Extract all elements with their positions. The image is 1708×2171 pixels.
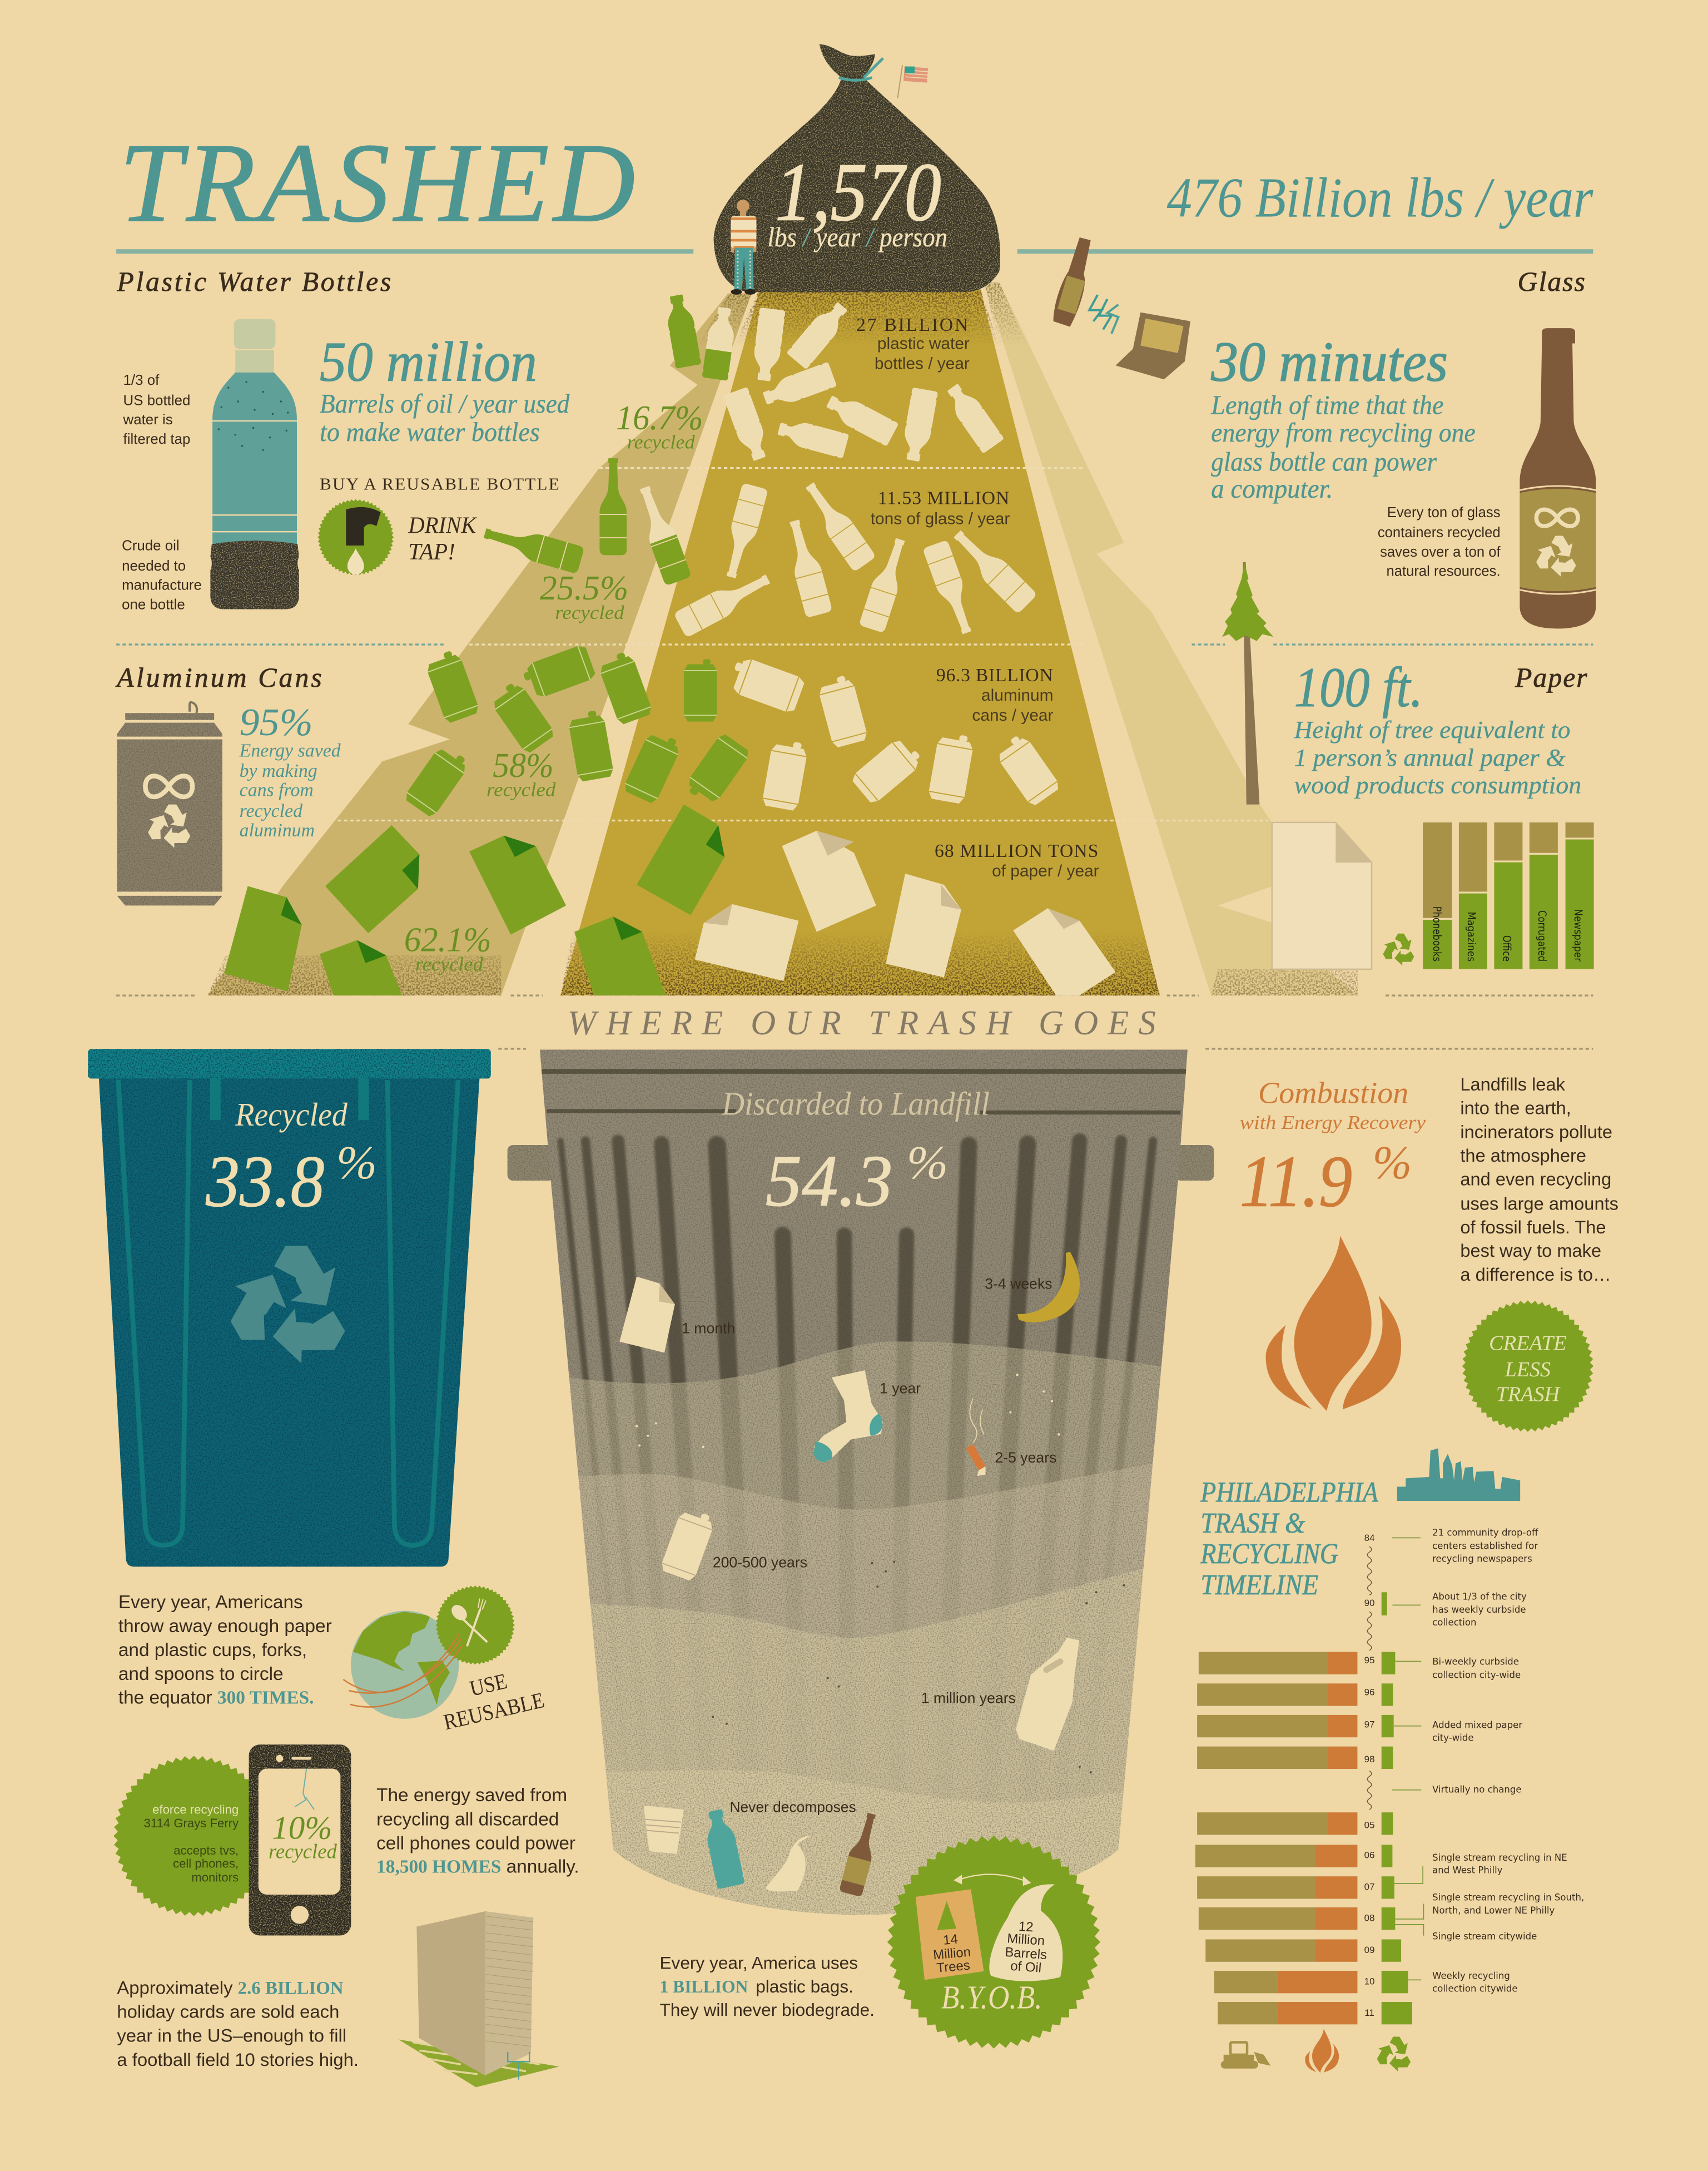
timeline: year labels: 95 — [1364, 1655, 1374, 1666]
text: paper and plastic cups: throw away enough paper — [118, 1616, 332, 1637]
paper bag: trees: Trees — [936, 1958, 971, 1976]
recycling mark — [143, 805, 192, 852]
decomposition item: plastic jug: 1 million years — [921, 1689, 1016, 1706]
illustration: cell phone: recycled — [269, 1840, 337, 1863]
funnel: left tan side stream — [207, 294, 752, 995]
stat: 100 ft: 100 ft. — [1294, 656, 1423, 719]
decomposition items: never decomposes: Never decomposes — [729, 1798, 856, 1815]
badge: drink tap — [317, 499, 394, 575]
stat: paper recycled — [404, 921, 491, 975]
stat text: glass energy: glass bottle can power — [1211, 448, 1437, 477]
text: paper and plastic cups: and spoons to circle — [118, 1664, 284, 1684]
timeline: year labels: 06 — [1364, 1850, 1374, 1860]
cup — [644, 1806, 684, 1854]
label: can count: 96.3 BILLION — [936, 665, 1053, 686]
text: drink tap — [408, 513, 478, 565]
plastic bag: oil — [989, 1884, 1062, 1981]
text: holiday cards: 2.6 BILLION — [238, 1978, 344, 1998]
blue recycling bin — [88, 1049, 491, 1567]
bar chart: paper recycling rates: Newspaper — [1572, 909, 1585, 961]
bottle note: crude oil: Crude oil — [122, 538, 180, 554]
bin icon: recycling symbol — [216, 1246, 351, 1374]
icon: philadelphia skyline — [1397, 1448, 1520, 1501]
text: holiday cards: a football field 10 stories high. — [117, 2049, 359, 2070]
badge: eforce recycling: cell phones, — [173, 1857, 239, 1871]
text: plastic bags: plastic bags. — [751, 1976, 853, 1996]
decomposition item: paper: 1 month — [682, 1320, 735, 1337]
stat: 95 percent: 95% — [240, 701, 313, 744]
label: can count: aluminum — [981, 686, 1053, 705]
heading rules — [116, 249, 1593, 254]
text: use reusable: USE — [468, 1669, 509, 1701]
label: paper tonnage — [935, 841, 1099, 880]
falling glass bottles — [673, 477, 1037, 638]
bottle note: filtered tap: US bottled — [123, 393, 190, 408]
utensil star badge — [435, 1585, 515, 1664]
timeline: year labels: 10 — [1364, 1976, 1374, 1987]
stat text: tree height: wood products consumption — [1294, 771, 1581, 799]
bar chart: paper recycling rates — [1423, 822, 1594, 969]
timeline: captions: 21 community drop-off — [1432, 1528, 1538, 1538]
stat: glass recycled — [540, 569, 628, 623]
note: ton of glass: saves over a ton of — [1380, 544, 1501, 560]
combustion heading — [1240, 1075, 1426, 1222]
decomposition item: banana — [985, 1252, 1080, 1322]
plastic bag: oil: of Oil — [1010, 1959, 1042, 1976]
text: drink tap: TAP! — [408, 539, 455, 565]
can percent sign: % — [907, 1137, 948, 1189]
text: landfills leak: best way to make — [1460, 1240, 1601, 1261]
timeline: year labels: 09 — [1364, 1945, 1374, 1955]
bar chart: paper recycling rates: Corrugated — [1536, 910, 1548, 961]
stat text: tree height: 1 person’s annual paper & — [1294, 744, 1566, 771]
timeline: captions: recycling newspapers — [1432, 1553, 1532, 1564]
call to action: buy a reusable bottle: BUY A REUSABLE BOTTLE — [320, 474, 559, 494]
decomposition item: can — [659, 1506, 807, 1582]
timeline: captions: and West Philly — [1432, 1865, 1503, 1876]
stat: glass recycled: recycled — [555, 602, 624, 623]
timeline: captions: About 1/3 of the city — [1432, 1591, 1527, 1602]
badge: eforce recycling: monitors — [191, 1871, 239, 1885]
timeline: captions: Single stream recycling in South, — [1432, 1892, 1584, 1903]
heading: aluminum cans: Aluminum Cans — [115, 662, 322, 693]
label: plastic bottle count — [856, 315, 970, 373]
timeline: year labels: 11 — [1364, 2008, 1374, 2018]
text: landfills leak: and even recycling — [1460, 1168, 1611, 1189]
stat: plastic recycled — [616, 399, 703, 453]
funnel: central gold stream — [560, 288, 1160, 995]
badge: create less trash: TRASH — [1496, 1383, 1561, 1406]
bar chart: paper recycling rates: Phonebooks — [1431, 906, 1443, 961]
icon: green recycling symbol — [1379, 934, 1416, 968]
label: plastic bottle count: 27 BILLION — [856, 315, 970, 335]
stat: 30 minutes: 30 minutes — [1210, 331, 1448, 394]
decomposition items: never decomposes — [644, 1798, 883, 1897]
total tonnage headline: 476 Billion lbs / year — [1167, 167, 1594, 230]
stat: 50 million: 50 million — [320, 331, 537, 394]
heading: philadelphia timeline: RECYCLING — [1200, 1538, 1338, 1570]
plastic bag: oil: 12 — [1018, 1919, 1034, 1935]
decomposition item: paper — [619, 1277, 735, 1353]
recycled paper sheets — [224, 805, 724, 995]
text: plastic bags: 1 BILLION — [659, 1977, 748, 1996]
stat: cans recycled: recycled — [486, 779, 556, 801]
double arrow — [954, 1875, 1031, 1886]
heading: where our trash goes: WHERE OUR TRASH GOES — [568, 1004, 1156, 1042]
label: can count: cans / year — [972, 706, 1054, 725]
plastic bag: oil: Million — [1007, 1931, 1045, 1949]
badge: B.Y.O.B. — [887, 1836, 1100, 2049]
landfill trash can — [508, 1038, 1214, 1939]
badge: eforce recycling — [113, 1756, 274, 1916]
illustration: water bottle with oil — [210, 319, 299, 609]
bin percent sign: % — [336, 1137, 377, 1189]
timeline: captions — [1432, 1528, 1584, 1994]
illustration: tree — [1222, 562, 1273, 805]
recycling mark — [1531, 536, 1578, 581]
heading: philadelphia timeline: TIMELINE — [1200, 1569, 1318, 1601]
legend icon: flame — [1305, 2029, 1339, 2073]
illustration: aluminum can — [117, 702, 222, 905]
timeline: captions: North, and Lower NE Philly — [1432, 1905, 1555, 1916]
infinity mark — [145, 776, 192, 797]
bottle note: crude oil: manufacture — [122, 578, 202, 593]
badge: eforce recycling: 3114 Grays Ferry — [144, 1816, 239, 1830]
decomposition item: sock: 1 year — [880, 1380, 921, 1397]
title: TRASHED — [119, 120, 635, 246]
stat: plastic recycled: recycled — [627, 432, 695, 453]
badge: create less trash: LESS — [1505, 1358, 1551, 1381]
icon: electricity bolts — [1089, 295, 1118, 334]
text: paper and plastic cups: Every year, Americans — [118, 1592, 303, 1613]
note: ton of glass: Every ton of glass — [1387, 505, 1501, 521]
legend icon: bulldozer — [1221, 2042, 1270, 2069]
text: paper and plastic cups: the equator — [118, 1688, 217, 1708]
timeline: year labels: 08 — [1364, 1913, 1374, 1924]
stat text: glass energy: a computer. — [1211, 474, 1333, 504]
stat text: energy saved: aluminum — [240, 820, 315, 841]
note: ton of glass: containers recycled — [1378, 525, 1501, 541]
badge: eforce recycling: accepts tvs, — [173, 1843, 239, 1857]
stat text: energy saved: by making — [240, 761, 317, 781]
heading: plastic water bottles: Plastic Water Bottles — [116, 266, 391, 297]
decomposition item: banana: 3-4 weeks — [985, 1276, 1052, 1292]
icon: laptop — [1116, 313, 1190, 379]
stat: paper recycled: recycled — [415, 953, 483, 975]
orange swoosh — [343, 1634, 462, 1707]
combustion heading: Combustion — [1258, 1075, 1408, 1109]
combustion percent sign: % — [1373, 1137, 1412, 1189]
timeline: recycling bars — [1382, 1592, 1412, 2024]
timeline: year labels — [1364, 1533, 1374, 2018]
text: landfills leak: a difference is to… — [1460, 1264, 1611, 1285]
icon: falling brown bottle — [1053, 237, 1091, 327]
text: plastic bags: They will never biodegrade. — [659, 2000, 875, 2020]
timeline: captions: Single stream recycling in NE — [1432, 1852, 1567, 1863]
timeline: wavy breaks — [1367, 1547, 1372, 1810]
timeline: year labels: 84 — [1364, 1533, 1374, 1543]
icon: person standing by bag — [731, 200, 756, 295]
text: energy saved from cell phones: recycling all discarded — [376, 1810, 559, 1830]
stat text: glass energy — [1210, 390, 1476, 504]
falling plastic water bottles — [723, 298, 1004, 463]
timeline: landfill and incineration bars — [1195, 1652, 1357, 2024]
text: energy saved from cell phones: 18,500 HOMES — [376, 1856, 501, 1877]
stat text: glass energy: energy from recycling one — [1211, 418, 1476, 448]
bottle note: filtered tap: 1/3 of — [123, 373, 160, 388]
bottle note: crude oil: one bottle — [122, 597, 185, 613]
text: plastic bags: Every year, America uses — [659, 1952, 858, 1972]
paper bag: trees: 14 — [942, 1932, 959, 1948]
plastic bag: oil: Barrels — [1005, 1945, 1047, 1962]
label: glass tonnage: tons of glass / year — [871, 509, 1010, 528]
text: holiday cards: holiday cards are sold each — [117, 2001, 339, 2021]
heading: philadelphia timeline: TRASH & — [1200, 1507, 1305, 1539]
decomposition item: plastic jug — [921, 1638, 1079, 1751]
illustration: large paper sheet — [1272, 822, 1372, 969]
brown bottle — [839, 1811, 883, 1897]
timeline: year labels: 97 — [1364, 1719, 1374, 1729]
illustration: globe with utensil badge — [343, 1585, 515, 1719]
stat text: energy saved: Energy saved — [239, 741, 341, 761]
text: landfills leak: the atmosphere — [1460, 1145, 1586, 1166]
text: landfills leak: Landfills leak — [1460, 1074, 1566, 1094]
stat text: energy saved: recycled — [240, 801, 302, 821]
stat text: glass energy: Length of time that the — [1210, 390, 1444, 420]
heading: glass: Glass — [1518, 266, 1586, 297]
text: landfills leak: into the earth, — [1460, 1098, 1571, 1118]
badge: create less trash — [1462, 1300, 1593, 1432]
illustration: cell phone — [249, 1744, 351, 1935]
timeline: year labels: 96 — [1364, 1687, 1374, 1698]
decomposition item: cigarette — [966, 1399, 1056, 1476]
timeline: captions: Weekly recycling — [1432, 1971, 1510, 1981]
text: use reusable — [441, 1669, 547, 1734]
section dividers — [116, 468, 1593, 1049]
text: energy saved from cell phones: cell phones could power — [376, 1833, 575, 1853]
text: energy saved from cell phones: The energy saved from — [376, 1785, 567, 1806]
heading: paper: Paper — [1515, 662, 1588, 693]
bag figure 1,570: 1,570 — [775, 146, 941, 238]
stat text: barrels of oil: to make water bottles — [320, 418, 540, 447]
recycled glass bottles — [481, 458, 692, 586]
timeline: year labels: 98 — [1364, 1754, 1374, 1764]
timeline: year labels: 07 — [1364, 1882, 1374, 1892]
label: glass tonnage: 11.53 MILLION — [878, 488, 1010, 508]
illustration: stack of cards on football field — [399, 1911, 559, 2087]
illustration: brown glass bottle — [1520, 328, 1596, 628]
badge: eforce recycling: eforce recycling — [152, 1803, 239, 1817]
badge: create less trash: CREATE — [1489, 1332, 1567, 1355]
stat: cans recycled: 58% — [493, 747, 554, 785]
timeline: year labels: 05 — [1364, 1820, 1374, 1831]
paper bag: trees: Million — [932, 1945, 971, 1963]
can label: discarded to landfill: Discarded to Landfill — [722, 1085, 990, 1122]
combustion figure: 11.9 — [1240, 1141, 1352, 1222]
note: ton of glass: natural resources. — [1386, 564, 1501, 579]
label: glass tonnage — [871, 488, 1010, 528]
bar chart: paper recycling rates: Magazines — [1465, 912, 1478, 961]
falling paper sheets — [695, 831, 1116, 995]
label: can count — [936, 665, 1054, 725]
text: paper and plastic cups: and plastic cups, forks, — [118, 1640, 307, 1661]
combustion heading: with Energy Recovery — [1240, 1112, 1426, 1133]
icon: american flag — [897, 65, 928, 98]
stat: cans recycled — [486, 747, 556, 801]
timeline: captions: has weekly curbside — [1432, 1604, 1526, 1615]
stat text: tree height: Height of tree equivalent to — [1294, 716, 1571, 744]
text: holiday cards: Approximately — [117, 1977, 238, 1997]
timeline: captions: Bi-weekly curbside — [1432, 1657, 1519, 1667]
label: paper tonnage: 68 MILLION TONS — [935, 841, 1099, 861]
stat text: energy saved: cans from — [240, 780, 314, 801]
stat: plastic recycled: 16.7% — [616, 399, 703, 437]
paper bag: trees — [916, 1889, 984, 1980]
bag caption: lbs / year / person — [767, 222, 947, 252]
bar chart: paper recycling rates: Office — [1501, 935, 1513, 961]
label: plastic bottle count: bottles / year — [875, 355, 970, 373]
text: holiday cards: year in the US–enough to fill — [117, 2025, 346, 2046]
funnel: right tan side stream — [984, 282, 1358, 995]
stat: glass recycled: 25.5% — [540, 569, 628, 607]
stat text: barrels of oil — [320, 389, 570, 447]
recycled plastic bottles — [663, 293, 738, 381]
text: landfills leak: incinerators pollute — [1460, 1122, 1612, 1142]
text: use reusable: REUSABLE — [441, 1688, 547, 1734]
text: drink tap: DRINK — [408, 513, 478, 539]
label: paper tonnage: of paper / year — [992, 862, 1099, 880]
stat text: tree height — [1294, 716, 1581, 799]
legend icon: recycling — [1373, 2037, 1412, 2074]
bottle note: crude oil: needed to — [122, 558, 186, 574]
timeline: captions: city-wide — [1432, 1733, 1474, 1743]
recycled aluminum cans — [403, 644, 751, 819]
decomposition item: sock — [814, 1370, 921, 1462]
plastic bag — [766, 1836, 810, 1891]
infinity mark — [1536, 509, 1578, 526]
text: paper and plastic cups: 300 TIMES. — [217, 1688, 314, 1708]
decomposition item: cigarette: 2-5 years — [995, 1449, 1056, 1466]
trash bag with headline number — [714, 44, 1000, 292]
timeline: year labels: 90 — [1364, 1598, 1374, 1608]
bottle note: filtered tap: filtered tap — [123, 432, 190, 447]
timeline: captions: Virtually no change — [1432, 1784, 1522, 1795]
text: landfills leak: of fossil fuels. The — [1460, 1217, 1606, 1237]
heading: philadelphia timeline — [1200, 1476, 1379, 1601]
label: plastic bottle count: plastic water — [877, 334, 970, 353]
small water bottle — [702, 1807, 745, 1889]
timeline: captions: Single stream citywide — [1432, 1931, 1537, 1941]
text: energy saved from cell phones: annually. — [501, 1856, 579, 1877]
funnel: dark dust at base and top — [207, 282, 1358, 995]
illustration: cell phone: 10% — [272, 1809, 332, 1846]
heading: philadelphia timeline: PHILADELPHIA — [1200, 1476, 1379, 1508]
bin figure: 33.8 percent: 33.8 — [205, 1141, 325, 1222]
badge: B.Y.O.B.: B.Y.O.B. — [941, 1979, 1042, 2015]
icon: flame — [1266, 1236, 1401, 1411]
bin label: recycled: Recycled — [235, 1096, 348, 1133]
timeline: captions: collection — [1432, 1617, 1476, 1628]
text: landfills leak: uses large amounts — [1460, 1193, 1618, 1213]
can figure: 54.3 percent: 54.3 — [766, 1140, 893, 1222]
timeline: captions: collection citywide — [1432, 1984, 1518, 1994]
stat: paper recycled: 62.1% — [404, 921, 491, 959]
timeline: captions: Added mixed paper — [1432, 1719, 1522, 1730]
stat text: barrels of oil: Barrels of oil / year used — [320, 389, 570, 419]
timeline: captions: centers established for — [1432, 1540, 1538, 1551]
falling aluminum cans — [727, 655, 1061, 811]
debris specks — [635, 1374, 1125, 1773]
decomposition item: can: 200-500 years — [713, 1554, 807, 1570]
can handles — [508, 1145, 1214, 1181]
timeline: leader lines — [1392, 1538, 1423, 1980]
timeline: captions: collection city-wide — [1432, 1669, 1521, 1680]
bottle note: filtered tap: water is — [123, 412, 173, 428]
note: ton of glass — [1378, 505, 1501, 579]
